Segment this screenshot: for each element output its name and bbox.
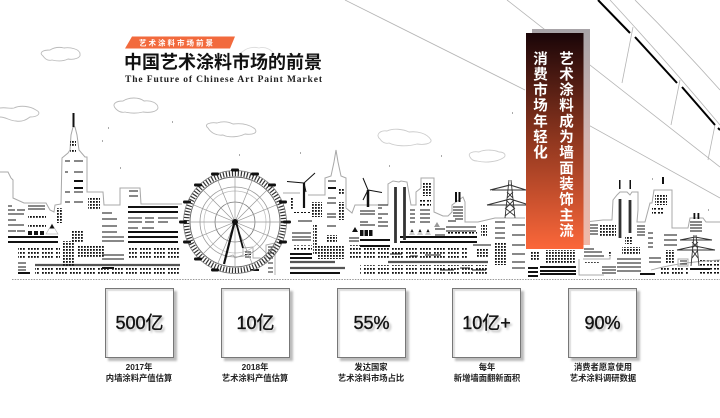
stat label: 10亿+ xyxy=(454,362,520,383)
perspective lines top right xyxy=(345,0,720,198)
stat card: 90% xyxy=(568,288,637,358)
stat label: 500亿: 2017年 xyxy=(126,362,152,372)
wind turbine 1 xyxy=(287,173,315,208)
cloud 1 xyxy=(41,47,80,61)
panel shadow xyxy=(532,29,590,245)
stat card: 10亿+: 10亿+ xyxy=(462,313,511,333)
city windows and bars xyxy=(8,113,720,276)
ferris wheel xyxy=(179,168,291,274)
cloud 7 xyxy=(469,150,505,162)
stat label: 10亿: 艺术涂料产值估算 xyxy=(222,373,288,383)
stat label: 10亿+: 新增墙面翻新面积 xyxy=(454,373,520,383)
stat label: 90%: 艺术涂料调研数据 xyxy=(570,373,636,383)
panel front xyxy=(526,33,584,249)
cloud 3 xyxy=(114,98,158,113)
panel headline column 1: 艺术涂料成为墙面装饰主流 xyxy=(557,51,573,239)
stat label: 55%: 艺术涂料市场占比 xyxy=(338,373,404,383)
stat label: 10亿: 2018年 xyxy=(242,362,268,372)
stat card: 10亿: 10亿 xyxy=(236,313,275,333)
stat label: 55%: 发达国家 xyxy=(354,362,388,372)
panel headline column 2: 消费市场年轻化 xyxy=(531,51,547,161)
stat card: 10亿+ xyxy=(452,288,521,358)
towers and chimneys xyxy=(72,113,74,127)
title tag: 艺术涂料市场前景 xyxy=(139,38,214,48)
cloud 6 xyxy=(378,129,431,146)
title: 中国艺术涂料市场的前景 xyxy=(124,52,322,72)
sky specks xyxy=(102,113,709,210)
subtitle: The Future of Chinese Art Paint Market xyxy=(125,75,323,85)
stat label: 90%: 消费者愿意使用 xyxy=(574,362,632,372)
stat label: 10亿 xyxy=(222,362,288,383)
small building frames xyxy=(227,243,720,275)
stat label: 55% xyxy=(338,362,404,383)
title tag xyxy=(125,36,235,48)
stat label: 90% xyxy=(570,362,636,383)
pylon 2 xyxy=(677,235,715,266)
dashed ground line xyxy=(12,278,720,280)
stat card: 500亿 xyxy=(105,288,174,358)
window blocks xyxy=(70,141,76,146)
wind turbine 2 xyxy=(363,178,382,207)
stat card: 55%: 55% xyxy=(353,313,390,333)
triangles xyxy=(46,224,58,234)
cloud 4 xyxy=(206,122,256,137)
cloud 2 xyxy=(0,106,39,121)
stat card: 10亿 xyxy=(221,288,290,358)
stat card: 500亿: 500亿 xyxy=(115,313,164,333)
stat label: 500亿: 内墙涂料产值估算 xyxy=(106,373,172,383)
pylon 1 xyxy=(487,180,526,218)
stat card: 90%: 90% xyxy=(584,313,621,333)
stat card: 55% xyxy=(337,288,406,358)
stat label: 500亿 xyxy=(106,362,172,383)
cloud 5 xyxy=(239,47,275,56)
stat label: 10亿+: 每年 xyxy=(479,362,495,372)
skyline outline xyxy=(0,127,720,228)
